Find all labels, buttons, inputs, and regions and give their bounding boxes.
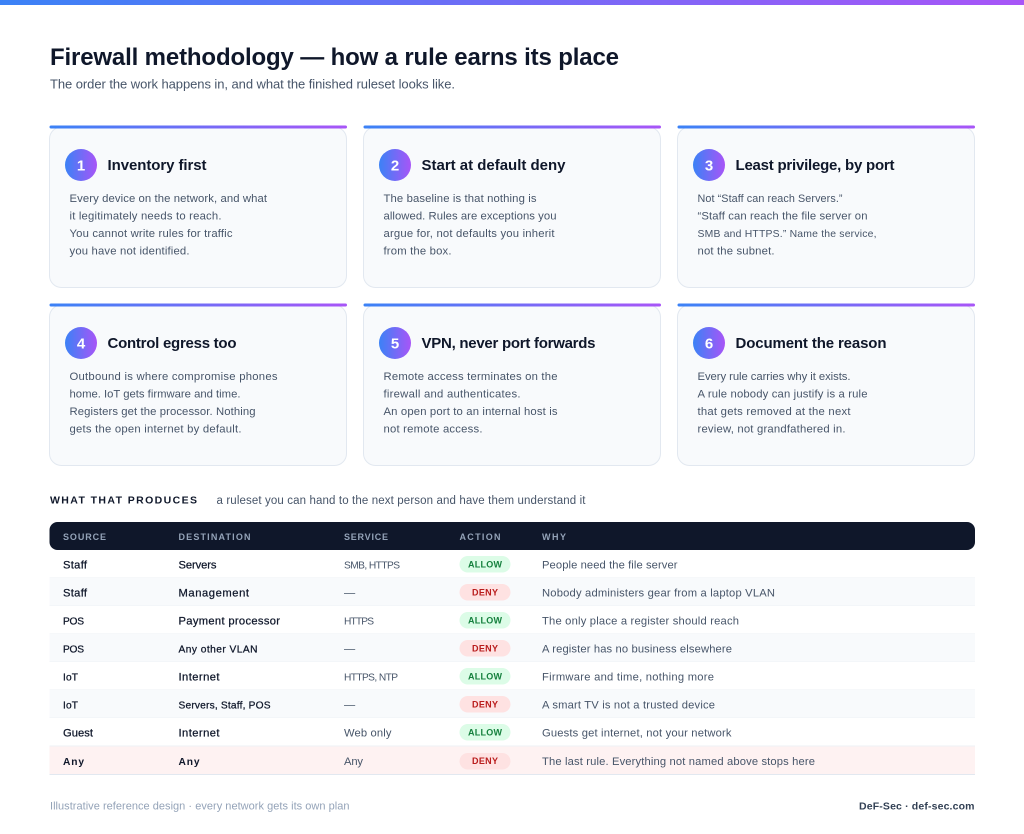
- body text: that gets removed at the next: [698, 406, 851, 418]
- row: staff to management: Management: [178, 588, 250, 600]
- row: staff to servers: People need the file server: [542, 560, 678, 572]
- table header: ACTION: [460, 532, 500, 542]
- row: iot to internet: HTTPS, NTP: [344, 672, 398, 684]
- body text: [384, 193, 556, 258]
- row: any to any final deny: DENY: [472, 756, 498, 766]
- row: any to any final deny: [50, 746, 975, 775]
- body text: you have not identified.: [70, 246, 190, 258]
- table header: WHY: [542, 532, 566, 542]
- body text: Every device on the network, and what: [70, 193, 268, 205]
- step number 4: 4: [77, 336, 86, 352]
- row: pos to payment processor: Payment processor: [178, 616, 280, 628]
- row: iot to servers staff pos: —: [344, 700, 356, 712]
- step number 4: [65, 327, 97, 359]
- section heading: a ruleset you can hand to the next person and have them understand it: [216, 495, 586, 507]
- body text: [698, 371, 868, 436]
- table header: [50, 522, 975, 550]
- row: staff to management: —: [344, 588, 356, 600]
- step number 2: 2: [391, 158, 399, 174]
- row: staff to servers: SMB, HTTPS: [344, 560, 400, 572]
- row: pos to any other vlan: POS: [63, 644, 84, 656]
- row: guest to internet: Guest: [63, 728, 94, 740]
- row: staff to servers: Servers: [178, 560, 217, 572]
- heading: Control egress too: [108, 335, 236, 352]
- body text: gets the open internet by default.: [70, 424, 242, 436]
- heading: Least privilege, by port: [736, 157, 894, 174]
- step number 3: [693, 149, 725, 181]
- panel: step 3 least privilege: [678, 126, 975, 288]
- row: pos to any other vlan: DENY: [472, 644, 498, 654]
- row: pos to payment processor: The only place a register should reach: [542, 616, 739, 628]
- subtitle: The order the work happens in, and what the finished ruleset looks like.: [50, 76, 455, 92]
- row: any to any final deny: Any: [344, 756, 363, 768]
- table header: SERVICE: [344, 532, 388, 542]
- body text: A rule nobody can justify is a rule: [698, 388, 868, 400]
- step number 5: 5: [391, 336, 399, 352]
- section heading: [50, 494, 586, 507]
- panel: step 1 inventory first: [50, 126, 347, 288]
- heading: VPN, never port forwards: [422, 335, 596, 352]
- heading: Document the reason: [736, 335, 886, 352]
- row: pos to any other vlan: A register has no business elsewhere: [542, 644, 732, 656]
- heading: Start at default deny: [422, 157, 566, 174]
- body text: [70, 193, 268, 258]
- body text: not the subnet.: [698, 246, 774, 258]
- body text: An open port to an internal host is: [384, 406, 558, 418]
- row: guest to internet: Internet: [178, 728, 220, 740]
- row: pos to any other vlan: Any other VLAN: [178, 644, 258, 656]
- body text: review, not grandfathered in.: [698, 424, 846, 436]
- body text: [70, 371, 278, 436]
- row: iot to servers staff pos: DENY: [472, 700, 498, 710]
- row: iot to internet: IoT: [63, 672, 78, 684]
- row: pos to payment processor: ALLOW: [468, 616, 502, 626]
- step number 6: [693, 327, 725, 359]
- row: iot to internet: ALLOW: [468, 672, 502, 682]
- body text: from the box.: [384, 246, 452, 258]
- panel: step 4 control egress: [50, 304, 347, 466]
- panel: step 6 document the reason: [678, 304, 975, 466]
- body text: firewall and authenticates.: [384, 388, 520, 400]
- row: staff to servers: [50, 550, 975, 578]
- title: Firewall methodology — how a rule earns its place: [50, 44, 619, 71]
- body text: Outbound is where compromise phones: [70, 371, 278, 383]
- row: staff to management: DENY: [472, 588, 498, 598]
- body text: You cannot write rules for traffic: [70, 228, 233, 240]
- section heading: WHAT THAT PRODUCES: [50, 494, 197, 506]
- row: guest to internet: Guests get internet, not your network: [542, 728, 732, 740]
- row: pos to any other vlan: —: [344, 644, 356, 656]
- row: guest to internet: ALLOW: [468, 728, 502, 738]
- row: pos to payment processor: POS: [63, 616, 84, 628]
- row: iot to internet: Internet: [178, 672, 220, 684]
- body text: allowed. Rules are exceptions you: [384, 210, 556, 222]
- top gradient bar: [0, 0, 1024, 5]
- row: guest to internet: [50, 718, 975, 746]
- row: any to any final deny: Any: [178, 757, 200, 768]
- row: staff to management: Staff: [63, 588, 88, 600]
- row: pos to payment processor: HTTPS: [344, 616, 374, 628]
- heading: Inventory first: [108, 157, 206, 174]
- row: guest to internet: Web only: [344, 728, 392, 740]
- row: pos to any other vlan: [50, 634, 975, 662]
- step number 5: [379, 327, 411, 359]
- row: staff to servers: ALLOW: [468, 560, 502, 570]
- row: iot to servers staff pos: Servers, Staff, POS: [178, 700, 271, 712]
- row: iot to servers staff pos: [50, 690, 975, 718]
- step number 3: 3: [705, 158, 713, 174]
- row: iot to internet: Firmware and time, nothing more: [542, 672, 714, 684]
- body text: Remote access terminates on the: [384, 371, 558, 383]
- row: staff to management: [50, 578, 975, 606]
- row: any to any final deny: Any: [63, 757, 84, 768]
- row: pos to payment processor: [50, 606, 975, 634]
- body text: “Staff can reach the file server on: [698, 210, 868, 222]
- ruleset table: [50, 522, 975, 775]
- body text: Every rule carries why it exists.: [698, 371, 850, 383]
- body text: The baseline is that nothing is: [384, 193, 537, 205]
- row: iot to internet: [50, 662, 975, 690]
- body text: [384, 371, 558, 436]
- body text: home. IoT gets firmware and time.: [70, 388, 240, 400]
- table header: DESTINATION: [178, 532, 250, 542]
- row: staff to servers: Staff: [63, 560, 88, 572]
- step number 1: [65, 149, 97, 181]
- body text: Registers get the processor. Nothing: [70, 406, 256, 418]
- footer brand: DeF-Sec · def-sec.com: [859, 800, 974, 812]
- row: staff to management: Nobody administers gear from a laptop VLAN: [542, 588, 775, 600]
- body text: not remote access.: [384, 424, 482, 436]
- body text: [698, 193, 876, 258]
- body text: it legitimately needs to reach.: [70, 210, 222, 222]
- footer note: Illustrative reference design · every network gets its own plan: [50, 800, 350, 812]
- body text: Not “Staff can reach Servers.”: [698, 193, 843, 205]
- row: any to any final deny: The last rule. Everything not named above stops here: [542, 756, 815, 768]
- step number 1: 1: [77, 158, 85, 174]
- body text: SMB and HTTPS.” Name the service,: [698, 229, 876, 240]
- panel: step 2 default deny: [364, 126, 661, 288]
- panel: step 5 vpn: [364, 304, 661, 466]
- row: iot to servers staff pos: A smart TV is not a trusted device: [542, 700, 715, 712]
- step number 2: [379, 149, 411, 181]
- step number 6: 6: [705, 336, 713, 352]
- row: iot to servers staff pos: IoT: [63, 700, 78, 712]
- table header: SOURCE: [63, 532, 106, 542]
- body text: argue for, not defaults you inherit: [384, 228, 555, 240]
